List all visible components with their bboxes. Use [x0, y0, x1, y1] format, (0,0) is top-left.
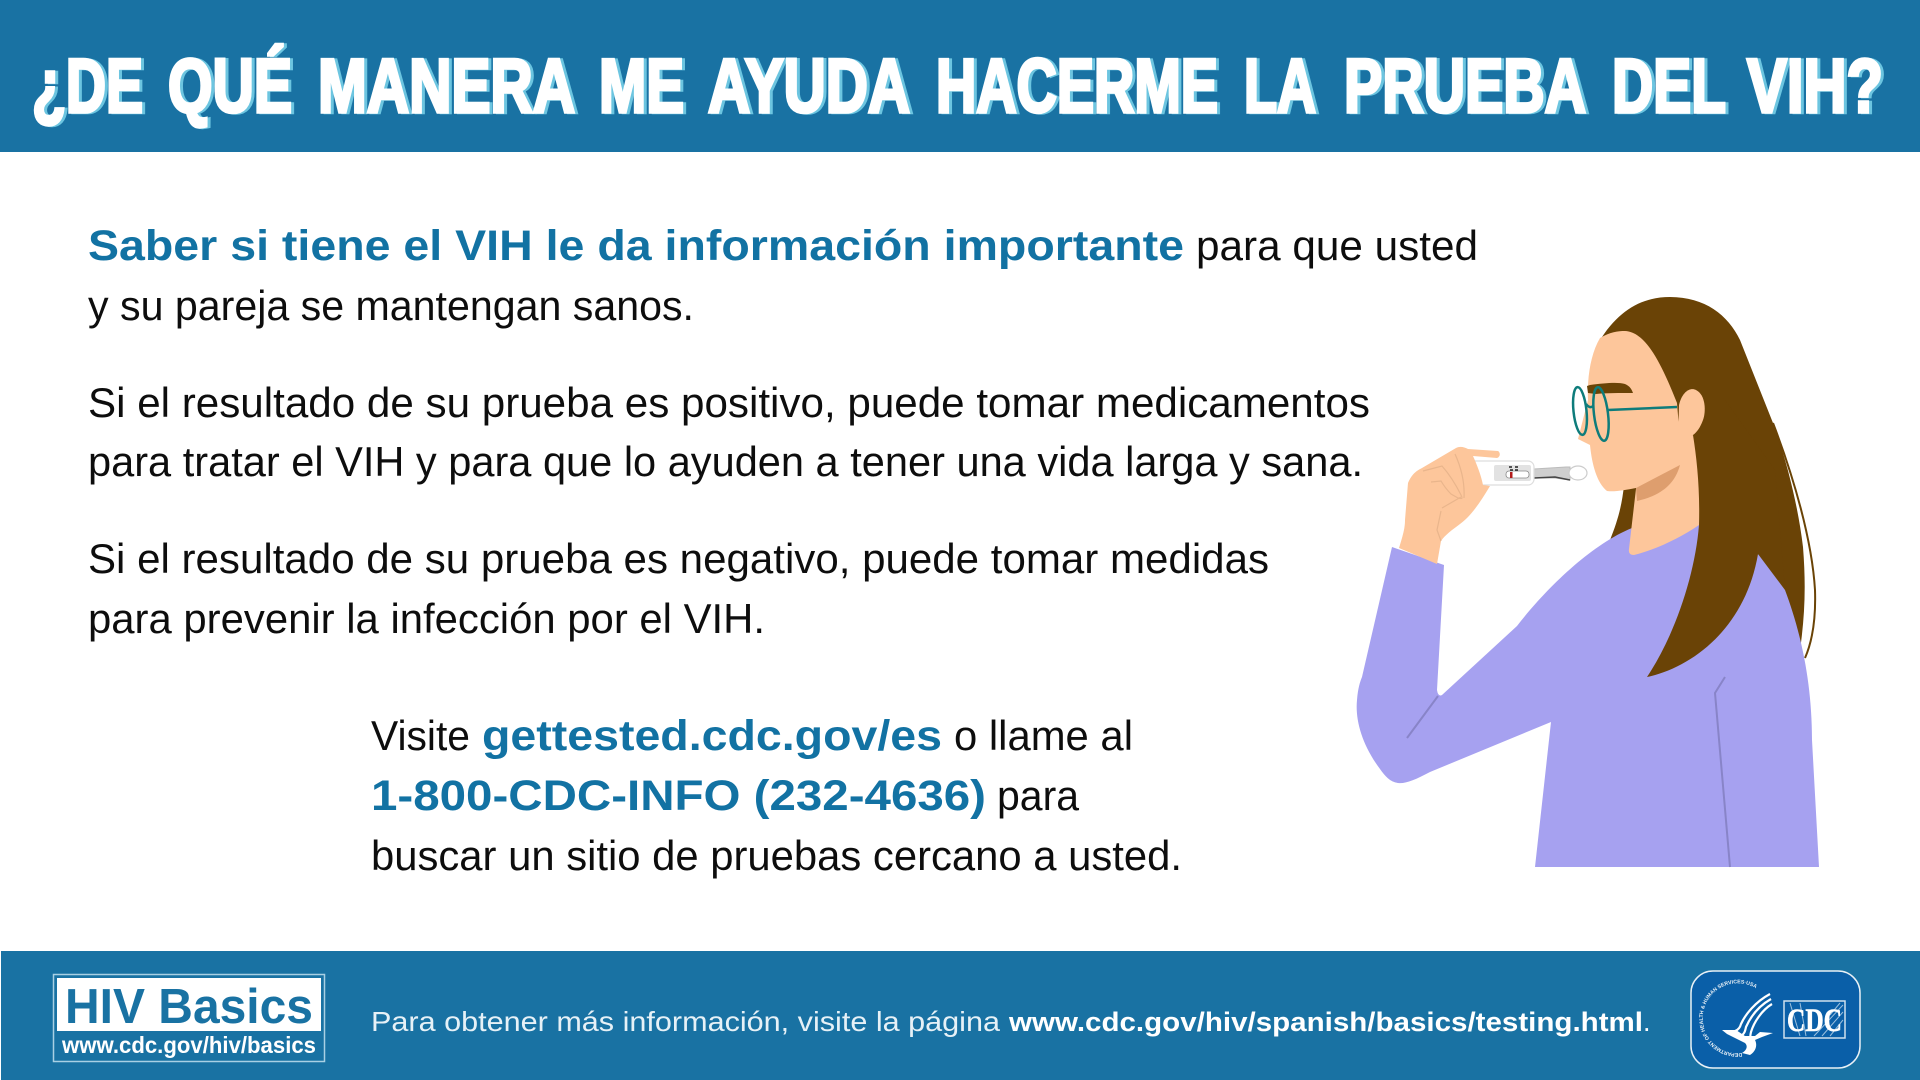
title: DEL: [1615, 45, 1729, 130]
title: MANERA: [318, 44, 575, 129]
front hair lock: [1647, 400, 1785, 677]
back hair: [1590, 297, 1805, 650]
HIV Basics logo: HIV Basics: [65, 980, 313, 1034]
intro paragraph: [88, 222, 1478, 329]
call to action: o llame al: [954, 712, 1133, 759]
footer text: Para obtener más información, visite la página: [371, 1006, 1000, 1037]
sweater: [1357, 525, 1819, 867]
positive result paragraph: [88, 379, 1370, 485]
HIV Basics logo: [54, 974, 324, 1062]
footer text: .: [1643, 1007, 1651, 1037]
illustration: woman taking an oral HIV test: [1357, 297, 1819, 867]
title: DEL: [1612, 44, 1726, 129]
footer band: [1, 951, 1920, 1080]
title: QUÉ: [168, 44, 292, 129]
call to action: buscar un sitio de pruebas cercano a usted.: [371, 832, 1182, 879]
hand: [1399, 447, 1500, 564]
sweater fold lines: [1407, 677, 1730, 867]
footer text: [371, 1006, 1651, 1037]
title: ME: [602, 45, 687, 130]
title: AYUDA: [708, 44, 910, 129]
test device: [1468, 461, 1587, 485]
title: QUÉ: [171, 45, 295, 130]
title: PRUEBA: [1347, 45, 1589, 130]
call to action: 1-800-CDC-INFO (232-4636): [371, 772, 986, 820]
call to action: gettested.cdc.gov/es: [482, 712, 942, 760]
title: AYUDA: [711, 45, 913, 130]
title: HACERME: [936, 44, 1218, 129]
call to action: Visite: [371, 712, 470, 759]
call to action: [371, 712, 1182, 879]
title: ME: [599, 44, 684, 129]
HHS seal: DEPARTMENT OF HEALTH & HUMAN SERVICES·USA: [1699, 980, 1756, 1057]
CDC box: CDC: [1787, 1003, 1842, 1039]
neck: [1629, 435, 1699, 555]
intro paragraph: Saber si tiene el VIH le da información importante: [88, 222, 1184, 270]
HHS and CDC logo: [1690, 970, 1861, 1069]
title: VIH?: [1750, 45, 1886, 130]
title: HACERME: [939, 45, 1221, 130]
eyebrow: [1587, 383, 1633, 394]
header banner: [0, 0, 1920, 152]
finger details: [1423, 454, 1464, 541]
title: [32, 44, 1886, 130]
negative result paragraph: Si el resultado de su prueba es negativo, puede tomar medidas: [88, 535, 1269, 582]
title: LA: [1247, 45, 1319, 130]
intro paragraph: y su pareja se mantengan sanos.: [88, 282, 694, 329]
title: VIH?: [1747, 44, 1883, 129]
face: [1578, 331, 1680, 491]
loose hair strand: [1773, 423, 1815, 658]
title: LA: [1244, 44, 1316, 129]
title: ¿DE: [35, 45, 146, 130]
positive result paragraph: para tratar el VIH y para que lo ayuden a tener una vida larga y sana.: [88, 438, 1363, 485]
chin shadow: [1636, 465, 1680, 501]
title: PRUEBA: [1344, 44, 1586, 129]
footer text: www.cdc.gov/hiv/spanish/basics/testing.html: [1008, 1007, 1643, 1037]
title: ¿DE: [32, 44, 143, 129]
HIV Basics logo: www.cdc.gov/hiv/basics: [61, 1032, 316, 1058]
positive result paragraph: Si el resultado de su prueba es positivo, puede tomar medicamentos: [88, 379, 1370, 426]
glasses: [1571, 386, 1677, 442]
ear: [1678, 389, 1705, 440]
negative result paragraph: [88, 535, 1269, 642]
call to action: para: [997, 772, 1080, 819]
title: MANERA: [321, 45, 578, 130]
intro paragraph: para que usted: [1196, 222, 1478, 269]
negative result paragraph: para prevenir la infección por el VIH.: [88, 595, 765, 642]
